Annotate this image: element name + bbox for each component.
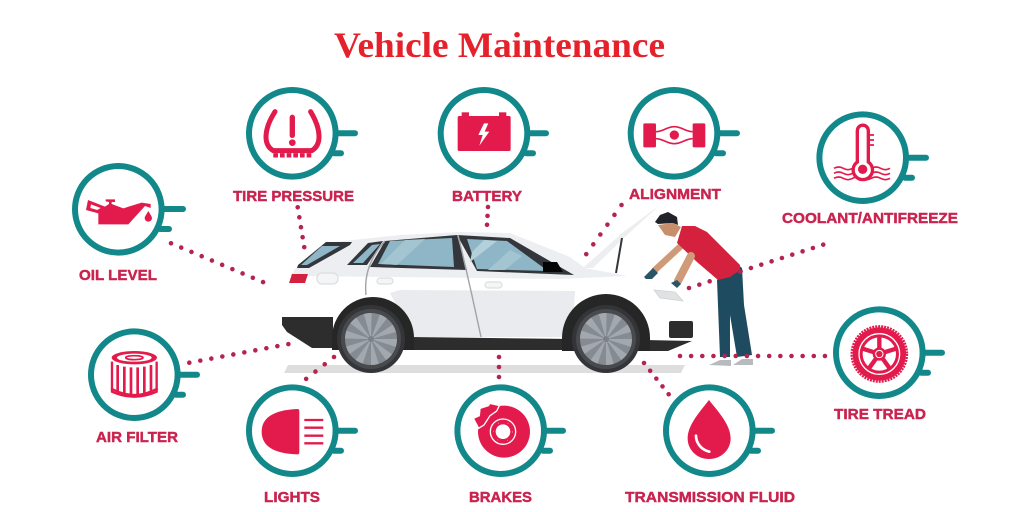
front door glass bbox=[457, 235, 574, 275]
connector: alignment bbox=[586, 205, 622, 254]
far arm bbox=[655, 245, 682, 270]
hood strut bbox=[616, 238, 622, 273]
front bumper lip bbox=[645, 340, 692, 351]
car body bbox=[282, 232, 692, 340]
upper body panel bbox=[290, 232, 627, 279]
label: TIRE TREAD bbox=[834, 406, 926, 423]
front grille bbox=[669, 321, 693, 338]
connector: brakes bbox=[497, 357, 501, 378]
icon: tire pressure warning bbox=[266, 112, 319, 155]
connector: tire tread bbox=[680, 354, 825, 358]
badge: tire pressure bbox=[233, 90, 355, 205]
rear quarter glass bbox=[297, 242, 352, 268]
badge: battery bbox=[441, 90, 546, 205]
connector: coolant dot on trousers bbox=[738, 269, 742, 274]
badge: air filter bbox=[91, 331, 197, 446]
label: BRAKES bbox=[469, 489, 532, 506]
connector: lights bbox=[306, 357, 334, 379]
rear bumper bbox=[282, 317, 333, 348]
label: AIR FILTER bbox=[96, 429, 178, 446]
icon: headlight bbox=[262, 409, 323, 454]
door lines bbox=[366, 235, 481, 337]
badge: coolant bbox=[782, 114, 958, 227]
rear wheel bbox=[332, 297, 414, 373]
icon: fluid drop bbox=[688, 400, 731, 459]
label: COOLANT/ANTIFREEZE bbox=[782, 210, 958, 227]
icon: air filter bbox=[111, 351, 158, 397]
side mirror bbox=[543, 262, 563, 272]
label: BATTERY bbox=[452, 188, 522, 205]
small side glass bbox=[347, 241, 383, 265]
hair bbox=[655, 212, 678, 225]
badge: oil level bbox=[75, 166, 183, 284]
icon: wheel and tread bbox=[852, 326, 907, 382]
sill bbox=[410, 337, 575, 350]
label: ALIGNMENT bbox=[629, 186, 721, 203]
icon: thermometer in water bbox=[834, 125, 890, 180]
label: TRANSMISSION FLUID bbox=[625, 489, 795, 506]
icon: axle bbox=[643, 123, 705, 147]
shirt bbox=[677, 226, 740, 280]
gloves bbox=[644, 268, 658, 279]
ground shadow bbox=[284, 365, 685, 373]
face bbox=[658, 223, 681, 237]
badge: tire tread bbox=[834, 309, 942, 423]
connector: oil level bbox=[171, 243, 264, 282]
connector: battery bbox=[487, 207, 488, 225]
connector dots behind mechanic: coolant bbox=[689, 242, 833, 288]
car illustration bbox=[282, 205, 693, 373]
tail light bbox=[289, 274, 308, 283]
dotted connectors bbox=[171, 205, 825, 394]
label: LIGHTS bbox=[264, 489, 320, 506]
connector: transmission fluid bbox=[644, 363, 669, 394]
icon: battery bbox=[458, 112, 511, 151]
front wheel bbox=[562, 294, 650, 373]
mechanic figure bbox=[644, 212, 753, 366]
manual in front of the car bbox=[654, 290, 683, 301]
near arm bbox=[678, 256, 691, 281]
door handles bbox=[317, 273, 502, 288]
badge: brakes bbox=[457, 387, 563, 506]
connector: air filter bbox=[189, 344, 289, 363]
shoes bbox=[709, 360, 731, 366]
lower door panel bbox=[390, 290, 575, 337]
trousers bbox=[717, 264, 752, 357]
badge: transmission fluid bbox=[625, 387, 795, 506]
label: OIL LEVEL bbox=[79, 267, 157, 284]
title: Vehicle Maintenance bbox=[334, 25, 665, 65]
open hood bbox=[583, 205, 660, 268]
connector: tire pressure bbox=[298, 207, 304, 248]
label: TIRE PRESSURE bbox=[233, 188, 354, 205]
icon: brake disc bbox=[473, 403, 530, 458]
icon: oil can bbox=[86, 199, 152, 224]
rear door glass bbox=[370, 235, 467, 270]
badge: lights bbox=[249, 387, 355, 506]
badge: alignment bbox=[629, 90, 737, 203]
